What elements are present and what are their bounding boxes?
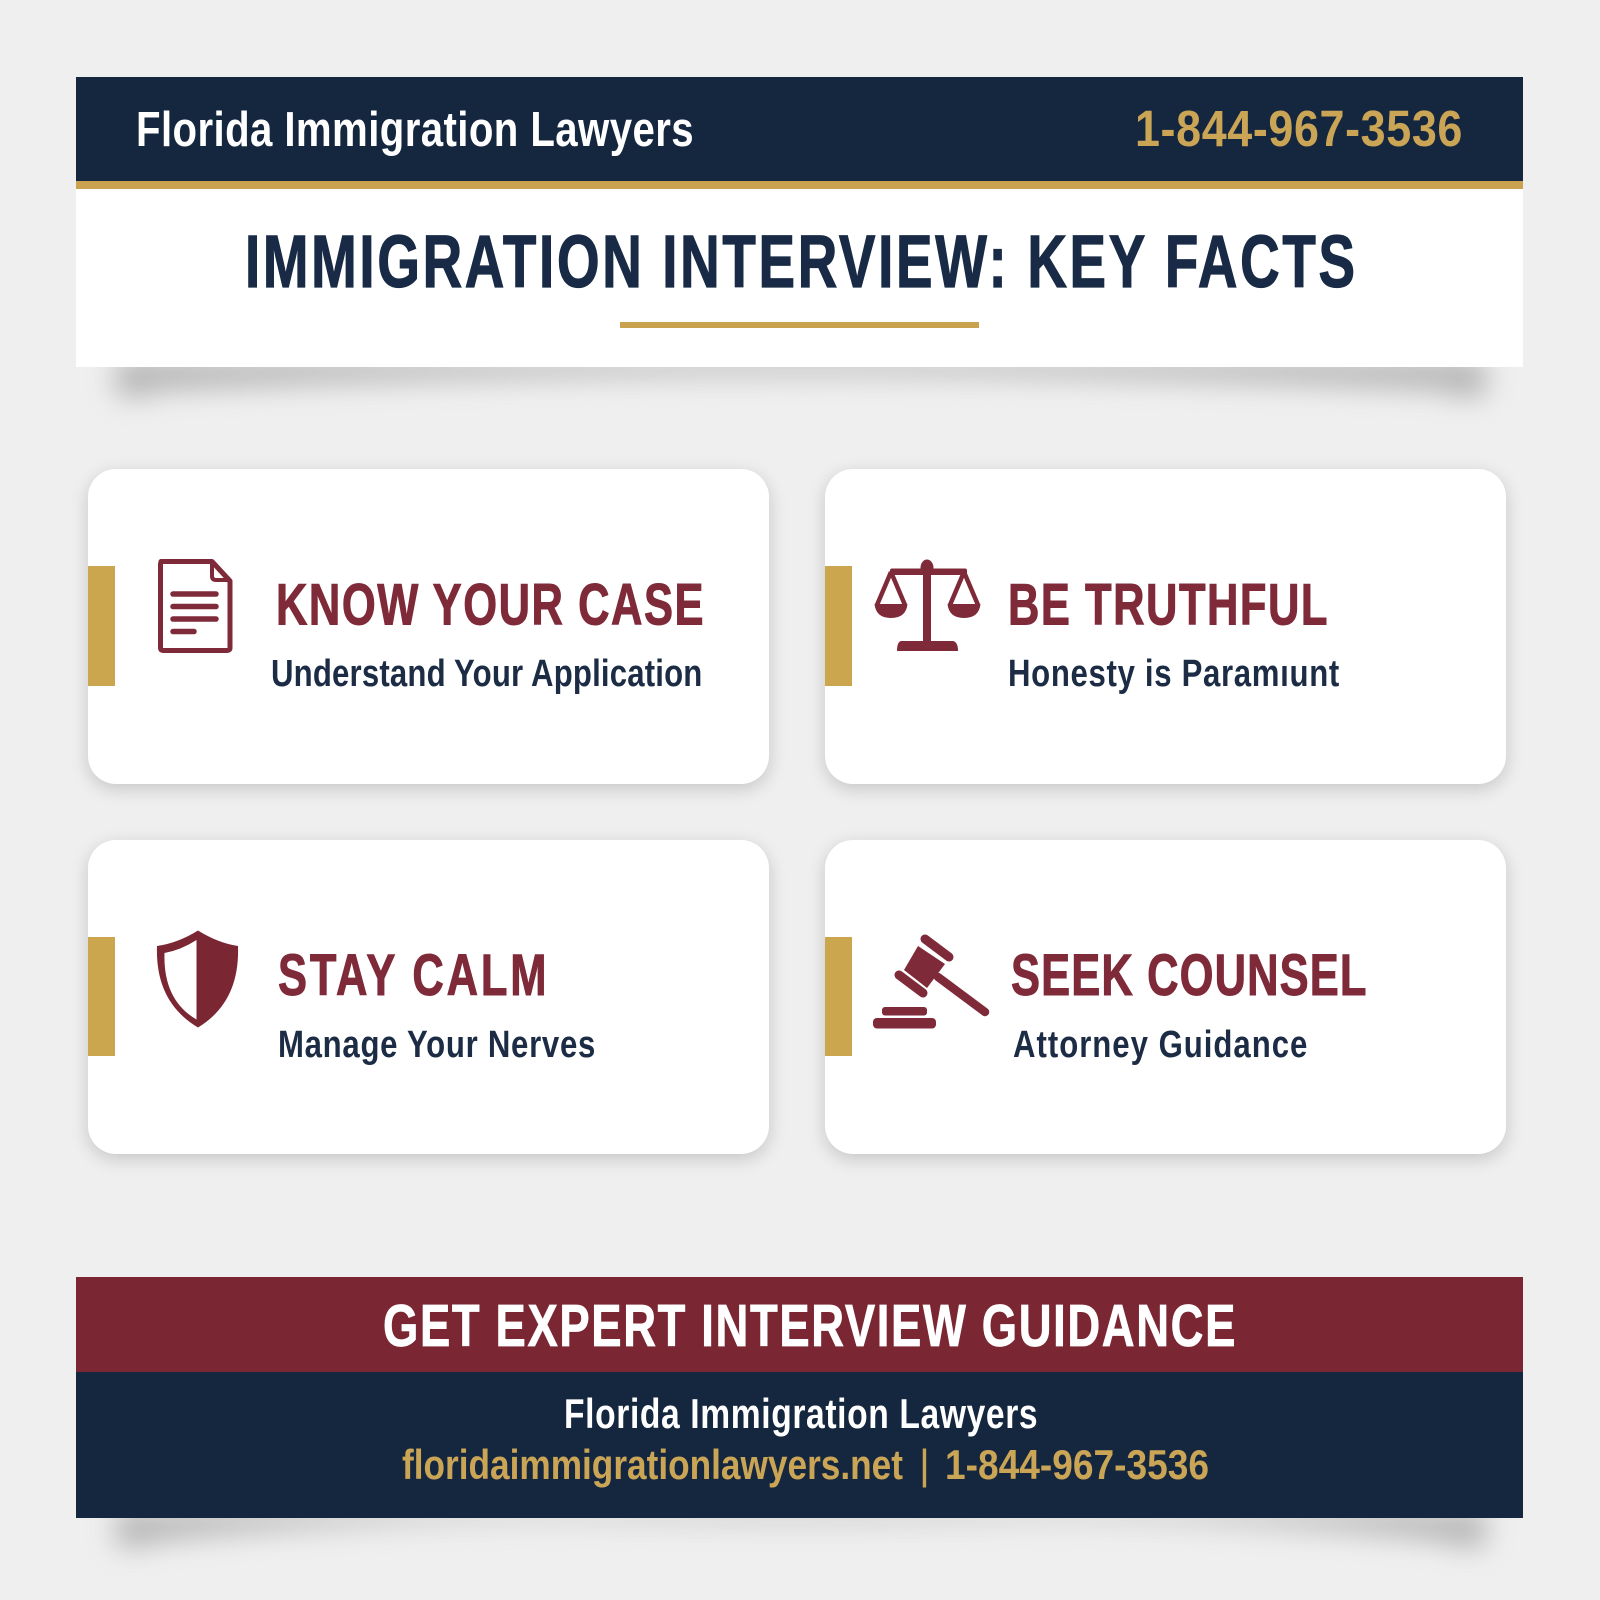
subheading: Honesty is Paramıunt (1008, 653, 1340, 695)
panel: be truthful (825, 469, 1506, 789)
heading: BE TRUTHFUL (1008, 572, 1328, 637)
title underline (620, 322, 979, 328)
title: IMMIGRATION INTERVIEW: KEY FACTS (245, 220, 1355, 303)
gold accent bar (825, 937, 852, 1056)
panel: stay calm (88, 840, 769, 1159)
call to action heading: GET EXPERT INTERVIEW GUIDANCE (383, 1293, 1235, 1359)
panel: seek counsel (825, 840, 1506, 1159)
panel: call to action footer (76, 1277, 1523, 1547)
gold accent bar (88, 566, 115, 686)
heading: SEEK COUNSEL (1011, 943, 1366, 1007)
firm name: Florida Immigration Lawyers (564, 1392, 1038, 1438)
panel: know your case (88, 469, 769, 789)
website and phone: floridaimmigrationlawyers.net (402, 1441, 903, 1488)
heading: KNOW YOUR CASE (276, 572, 704, 637)
heading: STAY CALM (278, 943, 547, 1007)
gold accent bar (825, 566, 852, 686)
icon: document (160, 562, 230, 650)
icon: shield (157, 930, 238, 1028)
website and phone: 1-844-967-3536 (945, 1441, 1209, 1488)
gold accent bar (88, 937, 115, 1056)
phone number: 1-844-967-3536 (1135, 101, 1462, 158)
subheading: Attorney Guidance (1013, 1024, 1307, 1066)
subheading: Understand Your Application (271, 653, 702, 695)
icon: gavel (873, 939, 985, 1028)
website and phone: | (919, 1441, 930, 1488)
subheading: Manage Your Nerves (278, 1024, 595, 1066)
icon: scales of justice (874, 560, 980, 651)
firm name: Florida Immigration Lawyers (136, 102, 694, 157)
panel: header (76, 77, 1523, 397)
